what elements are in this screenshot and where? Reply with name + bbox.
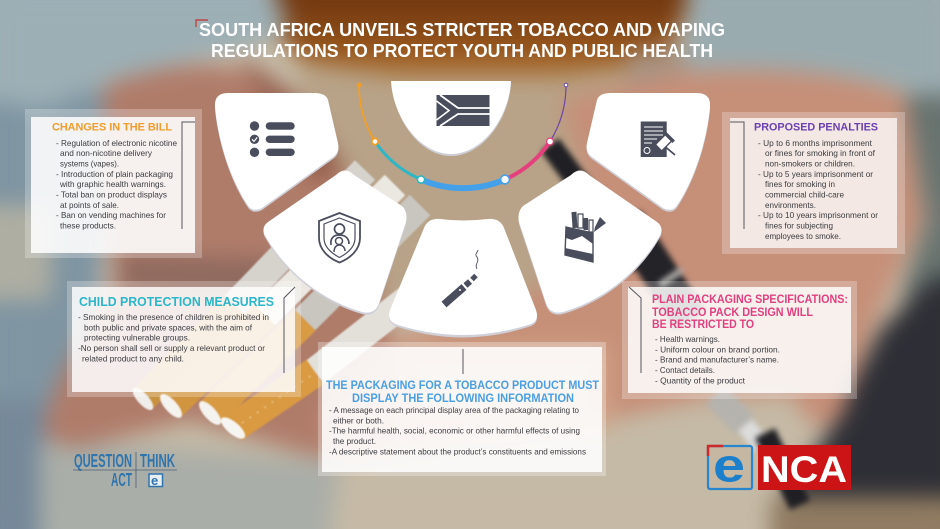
bullet text: - Ban on vending machines for: [56, 210, 166, 220]
bullet text: environments.: [765, 200, 816, 210]
title: [196, 19, 725, 61]
bullet text: - Up to 5 years imprisonment or: [758, 169, 873, 179]
bullet text: [329, 405, 586, 456]
panel: packaging information: [318, 342, 606, 476]
bullet text: systems (vapes).: [60, 158, 119, 168]
bullet text: - Contact details.: [655, 365, 715, 375]
bullet text: - Regulation of electronic nicotine: [56, 138, 177, 148]
bullet text: -No person shall sell or supply a relevant product or: [78, 343, 265, 353]
bullet text: [56, 138, 177, 230]
icon: shield with parent and child: [319, 213, 360, 262]
card: flag: [391, 81, 511, 156]
panel: changes in the bill: [25, 109, 202, 258]
card: vape: [389, 219, 537, 338]
bullet text: - Introduction of plain packaging: [56, 169, 173, 179]
icon: document and gavel: [641, 122, 675, 157]
bullet text: - Health warnings.: [655, 334, 720, 344]
bullet text: [78, 312, 269, 363]
logo: question think act: ACT: [111, 470, 132, 490]
bullet text: - Brand and manufacturer’s name.: [655, 355, 779, 365]
bullet text: - A message on each principal display area of the packaging relating to: [329, 405, 579, 415]
logo: eNCA: NCA: [761, 449, 847, 490]
panel: proposed penalties: [722, 112, 905, 254]
bullet text: at points of sale.: [60, 200, 119, 210]
bullet text: commercial child-care: [765, 190, 844, 200]
bullet text: - Up to 6 months imprisonment: [758, 138, 873, 148]
title: SOUTH AFRICA UNVEILS STRICTER TOBACCO AND VAPING: [199, 19, 725, 40]
bullet text: - Quantity of the product: [655, 375, 746, 385]
icon: vape pen: [444, 250, 478, 304]
card: cigarette pack: [518, 170, 662, 315]
bullet text: employees to smoke.: [765, 231, 841, 241]
logo: question think act: QUESTION: [74, 451, 132, 471]
logo: question think act: e: [151, 473, 158, 488]
bullet text: - Smoking in the presence of children is prohibited in: [78, 312, 269, 322]
panel: plain packaging specifications: [622, 281, 857, 399]
heading: TOBACCO PACK DESIGN WILL: [652, 305, 813, 319]
heading: CHANGES IN THE BILL: [52, 122, 172, 134]
heading: PLAIN PACKAGING SPECIFICATIONS:: [652, 292, 848, 306]
bullet text: non-smokers or children.: [765, 158, 855, 168]
card: checklist: [215, 93, 338, 212]
bullet text: -The harmful health, social, economic or other harmful effects of using: [329, 426, 580, 436]
card: shield: [263, 170, 406, 315]
card: gavel: [587, 93, 710, 212]
bullet text: - Uniform colour on brand portion.: [655, 344, 780, 354]
bullet text: fines for subjecting: [765, 220, 833, 230]
bullet text: [758, 138, 878, 241]
arc connector: [357, 83, 568, 188]
bullet text: -A descriptive statement about the product’s constituents and emissions: [329, 446, 586, 456]
bullet text: fines for smoking in: [765, 179, 835, 189]
logo: eNCA: [708, 438, 851, 492]
title: REGULATIONS TO PROTECT YOUTH AND PUBLIC HEALTH: [211, 40, 713, 61]
heading: BE RESTRICTED TO: [652, 317, 754, 331]
icon: checklist: [250, 121, 295, 157]
heading: [652, 292, 848, 331]
heading: DISPLAY THE FOLLOWING INFORMATION: [352, 391, 574, 405]
bullet text: the product.: [333, 436, 376, 446]
bullet text: both public and private spaces, with the aim of: [84, 322, 253, 332]
heading: CHILD PROTECTION MEASURES: [79, 295, 274, 309]
bullet text: and non-nicotine delivery: [60, 148, 153, 158]
bullet text: these products.: [60, 220, 116, 230]
heading: [326, 378, 600, 405]
bullet text: or fines for smoking in front of: [765, 148, 876, 158]
bullet text: related product to any child.: [82, 353, 184, 363]
logo: eNCA: e: [713, 438, 745, 492]
logo: question think act: THINK: [140, 451, 175, 471]
panel: child protection measures: [67, 281, 301, 397]
icon: open cigarette pack: [565, 212, 606, 262]
bullet text: protecting vulnerable groups.: [84, 333, 190, 343]
bullet text: - Total ban on product displays: [56, 190, 167, 200]
heading: THE PACKAGING FOR A TOBACCO PRODUCT MUST: [326, 378, 600, 392]
icon: South African flag: [436, 95, 490, 126]
bullet text: with graphic health warnings.: [59, 179, 166, 189]
logo: question think act: [73, 451, 177, 490]
bullet text: [655, 334, 780, 385]
bullet text: either or both.: [333, 415, 384, 425]
heading: PROPOSED PENALTIES: [754, 122, 878, 134]
bullet text: - Up to 10 years imprisonment or: [758, 210, 878, 220]
